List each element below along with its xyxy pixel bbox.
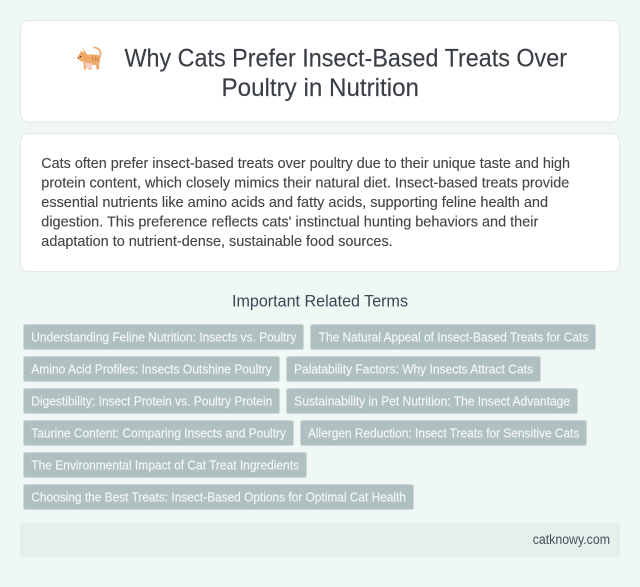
tag: feline nutrition: Understanding Feline Nutrition: Insects vs. Poultry (31, 330, 297, 344)
text block: summary paragraph: essential nutrients like amino acids and fatty acids, supporting feline health and (41, 195, 548, 211)
text block: summary paragraph: protein content, which closely mimics their natural diet. Insect-based treats provide (41, 176, 569, 192)
tag: environmental impact (24, 452, 306, 478)
tag: sustainability (286, 388, 578, 414)
footer (20, 523, 620, 557)
tag: taurine: Taurine Content: Comparing Insects and Poultry (31, 426, 287, 440)
tag: palatability (286, 356, 540, 382)
tag: digestibility (24, 388, 280, 414)
title (124, 44, 567, 102)
panel: summary (20, 134, 620, 272)
text block: summary paragraph: digestion. This preference reflects cats' instinctual hunting behaviors and their (41, 214, 538, 230)
tag: environmental impact: The Environmental Impact of Cat Treat Ingredients (31, 458, 299, 472)
panel: header (20, 20, 620, 122)
tag: taurine (24, 420, 294, 446)
text block: summary paragraph: Cats often prefer insect-based treats over poultry due to their unique taste and high (41, 156, 570, 172)
tag: allergen (300, 420, 586, 446)
tag: amino acid: Amino Acid Profiles: Insects Outshine Poultry (31, 362, 272, 376)
tag: choosing treats (24, 484, 414, 510)
icon: cat (77, 48, 101, 70)
tag: palatability: Palatability Factors: Why Insects Attract Cats (294, 362, 533, 376)
footer source: catknowy.com (533, 532, 610, 547)
text block: summary paragraph: adaptation to nutrient-dense, sustainable food sources. (41, 234, 393, 250)
tag list (24, 324, 596, 510)
heading: related terms: Important Related Terms (232, 292, 408, 310)
tag: natural appeal: The Natural Appeal of Insect-Based Treats for Cats (319, 330, 588, 344)
tag: choosing treats: Choosing the Best Treats: Insect-Based Options for Optimal Cat Health (31, 490, 406, 504)
tag: sustainability: Sustainability in Pet Nutrition: The Insect Advantage (294, 394, 570, 408)
text block: summary paragraph (41, 156, 570, 250)
tag: allergen: Allergen Reduction: Insect Treats for Sensitive Cats (308, 426, 579, 440)
tag: digestibility: Digestibility: Insect Protein vs. Poultry Protein (31, 394, 272, 408)
tag: natural appeal (310, 324, 596, 350)
title: Why Cats Prefer Insect-Based Treats Over (124, 44, 567, 72)
tag: feline nutrition (24, 324, 304, 350)
title: Poultry in Nutrition (222, 74, 419, 102)
tag: amino acid (24, 356, 280, 382)
